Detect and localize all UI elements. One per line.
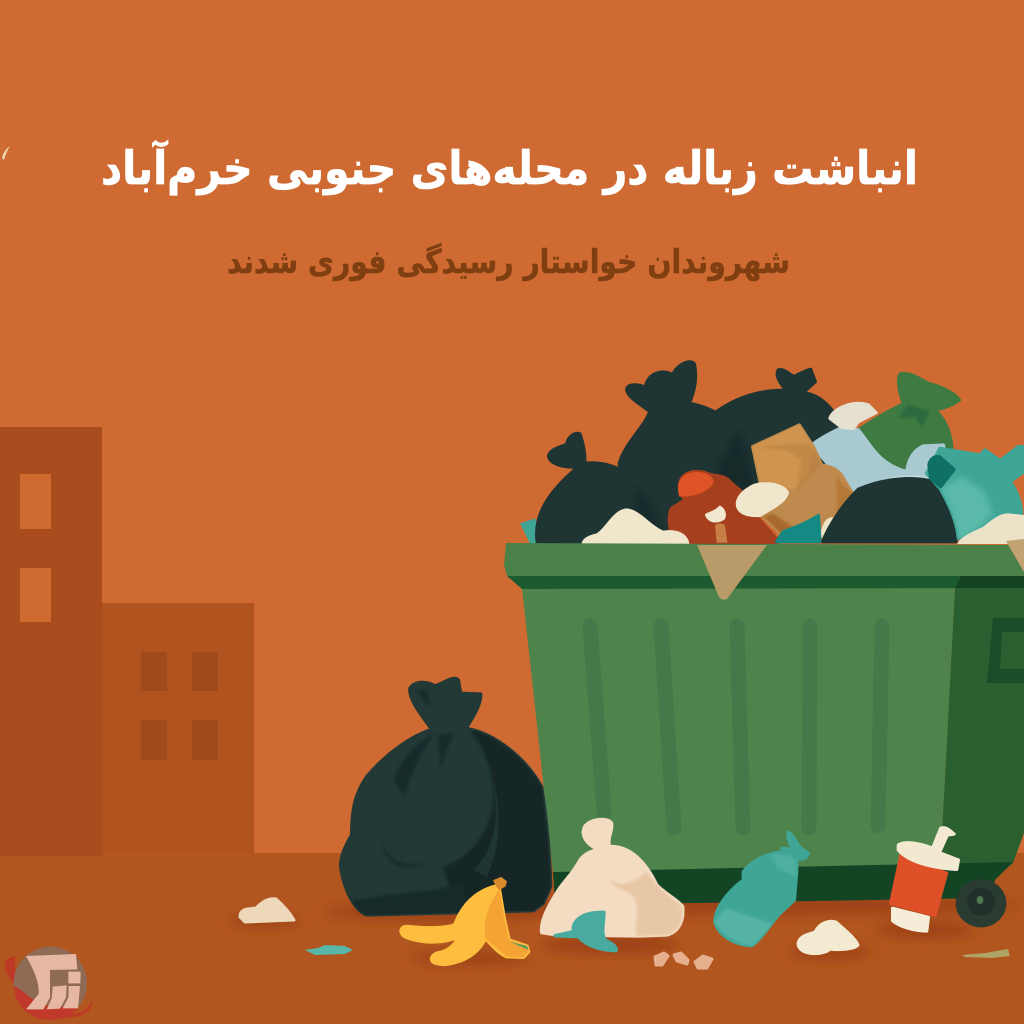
- short building: [102, 603, 254, 853]
- brown cardboard bag: [748, 422, 853, 537]
- white paper scrap: [737, 484, 787, 515]
- cream pile right: [957, 513, 1024, 544]
- cream scrap left: [240, 899, 294, 922]
- green bag: [858, 374, 959, 473]
- light blue bag: [812, 404, 953, 493]
- teal plastic bottle: [714, 832, 808, 946]
- ground: [0, 853, 1024, 1024]
- tall building: [0, 427, 102, 856]
- dumpster base: [553, 862, 1013, 903]
- logo: [5, 947, 92, 1020]
- teal scrap left: [520, 518, 543, 543]
- teal scrap ground: [305, 945, 353, 955]
- large black bag: [619, 362, 758, 537]
- dumpster: [504, 539, 1024, 903]
- title: انباشت زباله در محله‌های جنوبی خرم‌آباد: [101, 140, 918, 196]
- dumpster body front: [522, 588, 955, 872]
- red bag: [669, 471, 778, 543]
- olive scrap: [962, 949, 1010, 958]
- rim shadow: [507, 576, 1024, 589]
- pebbles: [655, 953, 712, 968]
- front black bag: [823, 479, 956, 542]
- side handle: [987, 618, 1024, 683]
- small corner mark: [2, 146, 10, 160]
- rim right shade: [955, 576, 1024, 588]
- cream scrap behind front bag: [821, 517, 837, 538]
- white scrap right: [798, 921, 858, 954]
- back black bag: [717, 369, 843, 490]
- large black bag on ground: [340, 678, 557, 917]
- left black bag: [537, 433, 667, 543]
- paper cup: [891, 828, 958, 931]
- ground shadows: [229, 895, 1020, 965]
- cream pile left: [582, 508, 689, 544]
- cardboard flap right: [1006, 539, 1024, 572]
- rim top: [504, 543, 1024, 576]
- white trash bag on ground: [541, 819, 683, 951]
- trash heap in dumpster: [520, 362, 1024, 544]
- banana peel: [401, 878, 529, 964]
- teal bag right: [927, 447, 1024, 540]
- dumpster right side: [940, 588, 1024, 880]
- cardboard flap: [697, 545, 767, 600]
- ribs: [590, 626, 882, 828]
- light blue rim behind front bag: [853, 475, 937, 493]
- subtitle: شهروندان خواستار رسیدگی فوری شدند: [227, 243, 790, 282]
- dumpster wheel: [956, 879, 1006, 927]
- teal scrap centre: [777, 516, 820, 542]
